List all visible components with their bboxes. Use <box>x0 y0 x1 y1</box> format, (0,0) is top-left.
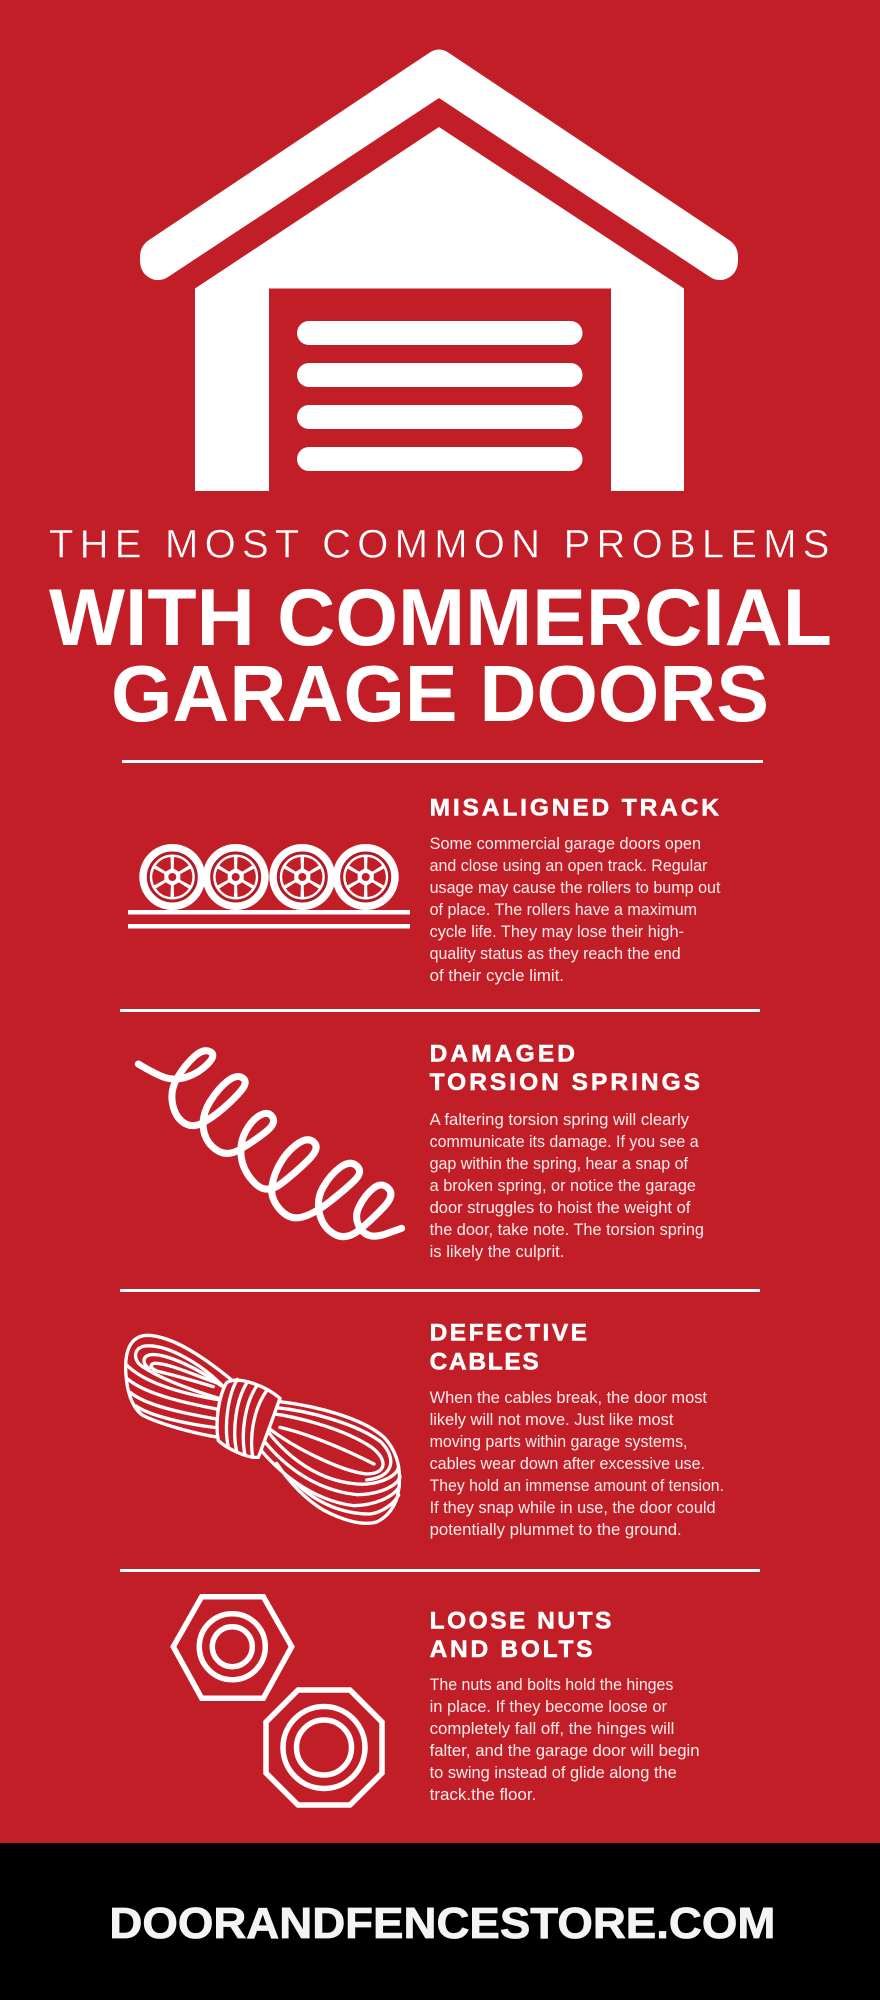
body text: cables wear down after excessive use. <box>430 1454 705 1473</box>
body text <box>430 834 721 985</box>
heading: DAMAGED <box>430 1041 575 1068</box>
body text: When the cables break, the door most <box>430 1388 707 1407</box>
icon: spring <box>138 1051 402 1237</box>
title line 1: THE MOST COMMON PROBLEMS <box>49 522 829 566</box>
body text: likely will not move. Just like most <box>430 1410 674 1429</box>
heading: LOOSE NUTS <box>430 1608 611 1635</box>
body text: gap within the spring, hear a snap of <box>430 1154 688 1173</box>
footer <box>0 1843 880 2000</box>
heading: DEFECTIVE <box>430 1320 587 1347</box>
body text: the door, take note. The torsion spring <box>430 1220 704 1239</box>
icon: rollers on track <box>128 844 410 928</box>
panel: damaged torsion springs <box>138 1041 704 1261</box>
body text: of place. The rollers have a maximum <box>430 900 697 919</box>
heading: TORSION SPRINGS <box>430 1069 700 1096</box>
body text: in place. If they become loose or <box>430 1697 667 1716</box>
body text: a broken spring, or notice the garage <box>430 1176 696 1195</box>
heading: AND BOLTS <box>430 1636 592 1663</box>
body text: They hold an immense amount of tension. <box>430 1476 724 1495</box>
body text: door struggles to hoist the weight of <box>430 1198 691 1217</box>
heading <box>430 1320 587 1375</box>
heading <box>430 1608 611 1663</box>
body text: A faltering torsion spring will clearly <box>430 1110 689 1129</box>
body text: cycle life. They may lose their high- <box>430 922 684 941</box>
body text <box>430 1675 700 1804</box>
body text <box>430 1110 704 1261</box>
body text: is likely the culprit. <box>430 1242 564 1261</box>
icon: nuts <box>173 1597 382 1805</box>
body text: The nuts and bolts hold the hinges <box>430 1675 673 1694</box>
body text: and close using an open track. Regular <box>430 856 708 875</box>
heading: CABLES <box>430 1348 539 1375</box>
body text <box>430 1388 724 1539</box>
title line 3: GARAGE DOORS <box>111 649 769 738</box>
body text: of their cycle limit. <box>430 966 564 985</box>
website: DOORANDFENCESTORE.COM <box>109 1899 775 1948</box>
panel: defective cables <box>126 1320 724 1539</box>
icon: coiled cable <box>126 1335 400 1523</box>
title line 2: WITH COMMERCIAL <box>49 573 832 663</box>
title <box>49 522 832 738</box>
body text: quality status as they reach the end <box>430 944 681 963</box>
panel: loose nuts and bolts <box>173 1597 700 1805</box>
door slats <box>297 321 582 471</box>
body text: track.the floor. <box>430 1785 536 1804</box>
roof <box>140 50 738 280</box>
body text: If they snap while in use, the door could <box>430 1498 716 1517</box>
icon: garage <box>140 50 738 491</box>
body text: falter, and the garage door will begin <box>430 1741 700 1760</box>
heading: MISALIGNED TRACK <box>430 795 719 822</box>
body text: moving parts within garage systems, <box>430 1432 688 1451</box>
house walls <box>195 127 684 491</box>
body text: completely fall off, the hinges will <box>430 1719 674 1738</box>
panel: misaligned track <box>128 795 721 985</box>
body text: usage may cause the rollers to bump out <box>430 878 721 897</box>
body text: potentially plummet to the ground. <box>430 1520 682 1539</box>
body text: communicate its damage. If you see a <box>430 1132 699 1151</box>
heading <box>430 1041 700 1096</box>
body text: to swing instead of glide along the <box>430 1763 677 1782</box>
body text: Some commercial garage doors open <box>430 834 701 853</box>
